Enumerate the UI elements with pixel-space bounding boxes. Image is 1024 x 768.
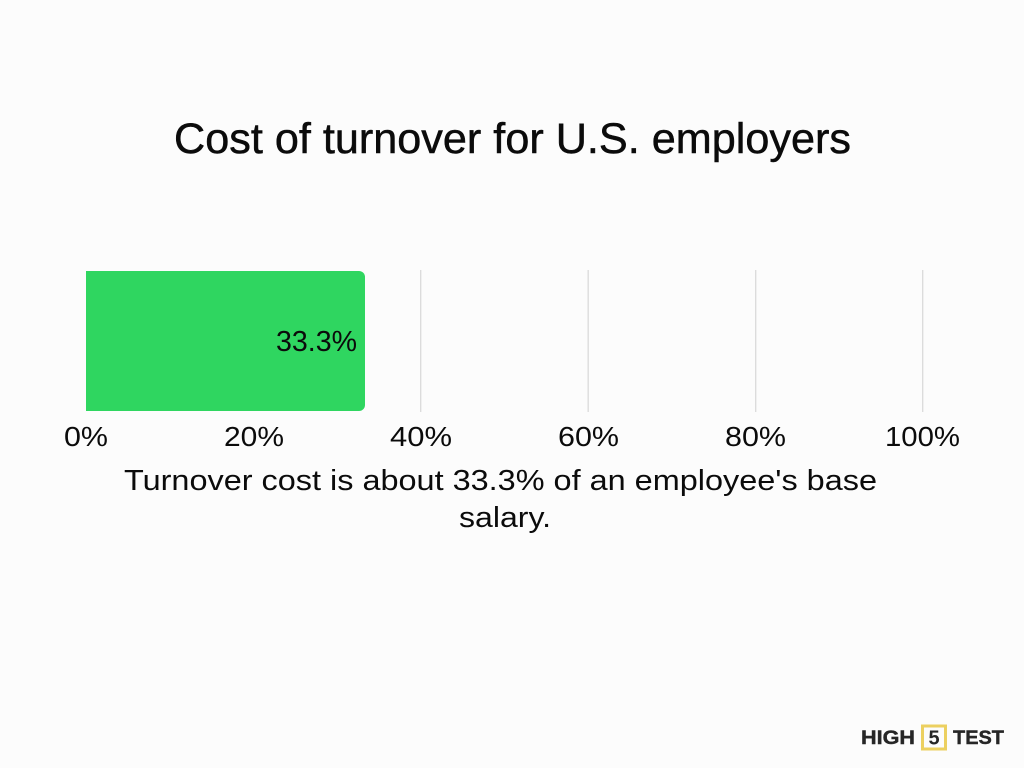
axis labels: 60%: [558, 421, 619, 452]
caption: Turnover cost is about 33.3% of an employee's base: [124, 465, 877, 497]
axis labels: 100%: [885, 421, 960, 452]
bar value label: 33.3%: [276, 326, 357, 358]
logo box: [922, 726, 946, 749]
logo: High 5 Test: [861, 726, 1004, 750]
axis labels: 80%: [725, 421, 786, 452]
title: Cost of turnover for U.S. employers: [174, 115, 851, 163]
logo: High 5 Test: HIGH: [861, 728, 915, 749]
caption: [124, 465, 877, 534]
axis labels: 0%: [64, 421, 108, 452]
bar: 33.3%: [86, 271, 365, 411]
axis labels: [64, 421, 960, 452]
caption: salary.: [459, 502, 551, 534]
bar chart: [64, 271, 960, 452]
axis labels: 20%: [224, 421, 284, 452]
axis labels: 40%: [390, 421, 452, 452]
logo: High 5 Test: TEST: [953, 728, 1004, 749]
logo: High 5 Test: 5: [928, 728, 940, 750]
